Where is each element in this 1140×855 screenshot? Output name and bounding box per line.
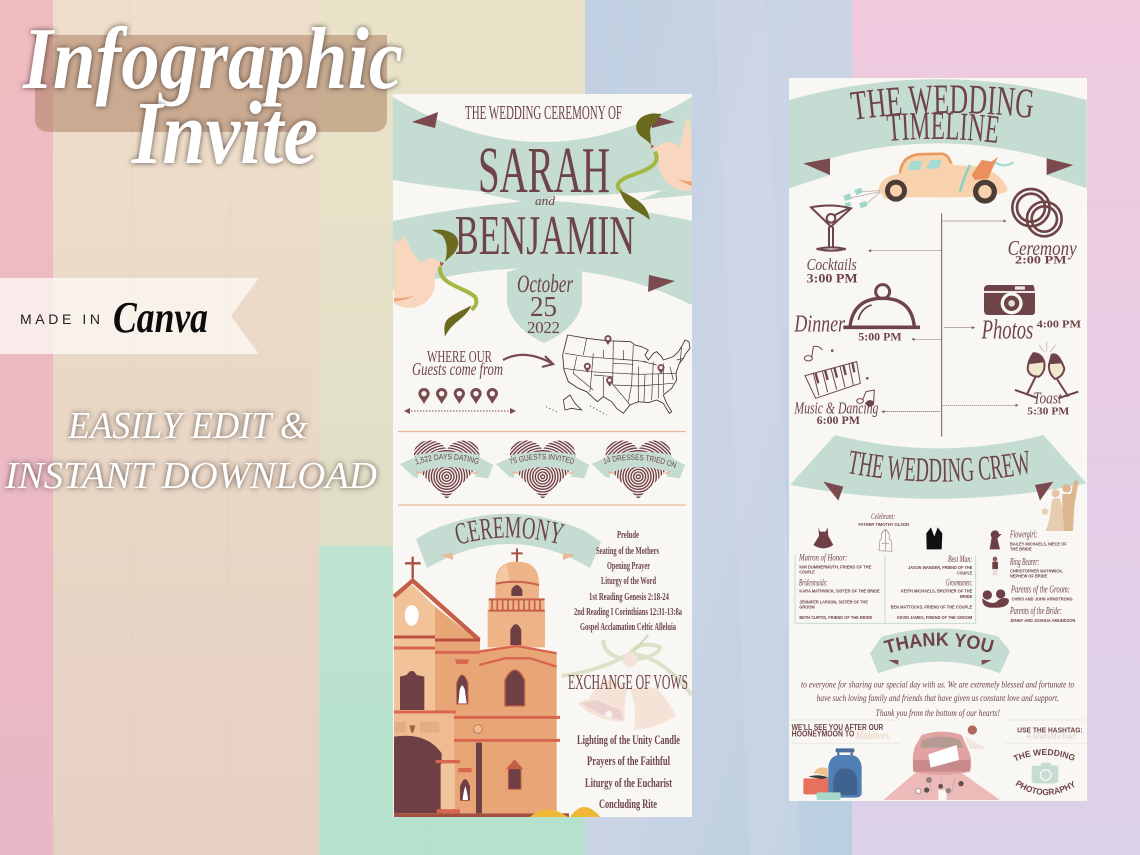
photographer badge: THE WEDDING — [1012, 749, 1075, 761]
groom's party: BEN MATTOCKS, FRIEND OF THE COUPLE — [891, 604, 972, 609]
illustration: pink getaway car and road — [883, 725, 1000, 800]
timeline title — [850, 85, 1033, 143]
label: music and dancing — [794, 398, 879, 427]
label: cocktails — [807, 255, 858, 285]
title line two: Invite — [131, 84, 318, 183]
vows list — [577, 732, 680, 811]
stat: guests invited: 75 GUESTS INVITED — [509, 454, 574, 464]
label: photos: Photos — [981, 314, 1033, 344]
illustration: wedding car — [843, 154, 1013, 208]
thank you banner — [870, 628, 1010, 673]
lower niche — [460, 779, 470, 801]
honeymoon note — [792, 723, 889, 742]
tower cross — [511, 548, 523, 562]
ring bearer text: NEPHEW OF BRIDE — [1010, 573, 1047, 578]
ceremony order list: Seating of the Mothers — [596, 546, 659, 557]
main title: Infographic Invite — [22, 11, 403, 183]
ceremony order list — [574, 530, 682, 633]
label: photos: 4:00 PM — [1037, 319, 1081, 330]
label: dinner — [794, 312, 902, 343]
made in canva ribbon — [0, 278, 259, 354]
ceremony banner — [416, 514, 601, 568]
dotted double arrow — [404, 408, 516, 414]
icon: keyboard and notes — [804, 346, 874, 406]
icon: suit — [926, 527, 942, 549]
timeline spine and arrows — [868, 213, 1018, 437]
round medallion — [474, 725, 482, 733]
bride's party: GROOM — [799, 604, 815, 609]
side niche — [457, 675, 468, 704]
banding — [394, 637, 480, 640]
tagline: EASILY EDIT & — [67, 405, 308, 447]
label: cocktails: 3:00 PM — [807, 271, 858, 285]
stat: dresses tried on — [592, 440, 685, 500]
heading: exchange of vows: EXCHANGE OF VOWS — [568, 670, 688, 694]
roof edge — [394, 581, 479, 640]
lower left wall — [394, 713, 454, 813]
groom's party: Best Man: — [948, 555, 972, 565]
thank you section — [790, 628, 1086, 800]
hashtag note: USE THE HASHTAG: — [1017, 725, 1083, 734]
label: dinner: 5:00 PM — [858, 331, 902, 343]
wedding crew section — [790, 435, 1086, 624]
icon: camera — [984, 285, 1035, 315]
illustration: luggage — [803, 748, 862, 800]
main arched door — [394, 736, 442, 813]
date shield: 2022 — [527, 318, 560, 337]
flower girl text — [1009, 530, 1067, 552]
photographer badge — [1012, 749, 1075, 796]
timeline title: TIMELINE — [886, 112, 999, 143]
bride's party: Bridesmaids: — [799, 579, 827, 589]
label: dinner: Dinner — [794, 312, 845, 338]
label: music and dancing: 6:00 PM — [817, 415, 860, 427]
label: music and dancing: Music & Dancing — [794, 398, 879, 417]
header banners — [393, 97, 692, 305]
title line one: Infographic — [22, 11, 403, 108]
ring bearer text: CHRISTOPHER MATHWICK, — [1010, 568, 1063, 573]
bride's party: KIM DUMMERMUTH, FRIEND OF THE — [799, 564, 871, 569]
and: and — [535, 193, 556, 208]
icon: wedding bells — [562, 635, 692, 730]
stat: days dating — [400, 440, 494, 500]
dark pilaster — [476, 743, 482, 813]
illustration: church — [394, 548, 601, 817]
icon: wedding rings — [1012, 189, 1062, 236]
bride's party: JENNIFER LARSON, SISTER OF THE — [799, 599, 868, 604]
flower girl text: BAILEY MICHAELS, NIECE OF — [1010, 542, 1067, 547]
panel: wedding timeline card — [789, 78, 1087, 801]
tagline: INSTANT DOWNLOAD — [4, 455, 377, 497]
label: cocktails: Cocktails — [807, 255, 857, 274]
icon: left dove with ribbon — [394, 230, 476, 337]
icon: bishop outline — [879, 529, 892, 551]
church cross — [405, 557, 421, 578]
ground strip — [394, 813, 569, 817]
vows list: Prayers of the Faithful — [587, 753, 670, 768]
octagon bands — [479, 646, 557, 667]
hashtag note: #AdamMichael — [1027, 731, 1077, 740]
timeline banner — [789, 79, 1087, 188]
icon: martini — [811, 206, 851, 251]
bride's party: Matron of Honor: — [798, 553, 847, 564]
made in canva ribbon: Canva — [113, 293, 208, 342]
label: ceremony — [1008, 238, 1077, 266]
thank you title: THANK YOU — [883, 632, 994, 653]
bride's party: KARA MATHWICK, SISTER OF THE BRIDE — [799, 589, 880, 594]
groom's party: BRIDE — [960, 594, 972, 599]
party column frame — [795, 555, 976, 623]
ceremony order list: 1st Reading Genesis 2:18-24 — [589, 592, 669, 603]
icon: cloche — [843, 285, 920, 327]
stats: fingerprint hearts — [400, 440, 685, 500]
label: toast: 5:30 PM — [1027, 405, 1070, 417]
panel: wedding ceremony invite card — [393, 94, 692, 817]
bride's party — [798, 553, 880, 620]
groom's party: Groomsmen: — [946, 579, 972, 589]
parents text: JENNY AND JOSHUA AMUNDSON — [1010, 618, 1075, 623]
label: toast — [1027, 388, 1070, 417]
banner fold triangles — [412, 112, 675, 292]
celebrant: FATHER TIMOTHY OLSON — [858, 522, 909, 527]
ceremony order list: 2nd Reading I Corinthians 12:31-13:8a — [574, 607, 682, 618]
date shield — [507, 261, 582, 343]
tower upper drum and dome — [495, 562, 539, 598]
honeymoon note: HOONEYMOON TO — [792, 730, 854, 739]
large tower window — [505, 670, 525, 706]
honeymoon note: Maldives — [855, 728, 889, 742]
date shield: October — [517, 271, 573, 298]
ring bearer text — [1009, 557, 1063, 578]
label: toast: Toast — [1033, 388, 1063, 407]
parents text: CHRIS AND JOHN ARMSTRONG — [1012, 597, 1073, 602]
ledge — [455, 659, 469, 664]
groom's party: COUPLE — [957, 570, 972, 575]
honeymoon note: WE'LL SEE YOU AFTER OUR — [792, 723, 884, 732]
column — [441, 764, 455, 809]
parents text: Parents of the Groom: — [1010, 585, 1070, 596]
parents text: Parents of the Bride: — [1009, 606, 1062, 617]
crew title: THE WEDDING CREW — [849, 450, 1028, 482]
main body — [435, 640, 557, 813]
name: Sarah: SARAH — [478, 134, 610, 207]
stat: dresses tried on: 14 DRESSES TRIED ON — [603, 454, 677, 468]
vows list: Lighting of the Unity Candle — [577, 732, 680, 747]
icon: dress — [813, 527, 833, 548]
gable facade — [394, 585, 435, 713]
icon: ring bearer — [992, 557, 998, 575]
name: Benjamin: BENJAMIN — [455, 205, 635, 267]
title backing shape — [35, 35, 387, 132]
icon: toasting glasses — [1015, 342, 1078, 398]
flower girl text: Flowergirl: — [1009, 530, 1037, 541]
stat: guests invited — [496, 440, 590, 500]
ring bearer text: Ring Bearer: — [1009, 557, 1039, 568]
thank you message: Thank you from the bottom of our hearts! — [876, 708, 1000, 718]
small gabled window — [506, 759, 523, 769]
groom's party: JASON WANDER, FRIEND OF THE — [908, 565, 972, 570]
bride's party: BETH CURTIS, FRIEND OF THE BRIDE — [799, 615, 872, 620]
photographer badge: PHOTOGRAPHY — [1016, 780, 1074, 796]
guest pins row — [418, 388, 498, 404]
icon: right dove with ribbon — [618, 113, 692, 220]
vows list: Liturgy of the Eucharist — [585, 775, 672, 790]
tower — [488, 610, 545, 647]
left door window — [400, 671, 424, 710]
guests section heading: Guests come from — [412, 359, 503, 379]
thank you message — [801, 679, 1075, 718]
illustration: bride and groom — [1042, 479, 1078, 531]
date shield: 25 — [530, 291, 557, 323]
icon: flower girl — [990, 530, 1002, 549]
thank you message: to everyone for sharing our special day with us. We are extremely blessed and fortunate to — [801, 679, 1075, 689]
vows list: Concluding Rite — [599, 796, 657, 811]
parents text — [1009, 585, 1075, 623]
crew banner — [790, 435, 1087, 499]
flower girl text: THE BRIDE — [1010, 547, 1032, 552]
celebrant: Celebrant: — [871, 511, 895, 521]
hashtag note — [1017, 725, 1083, 740]
groom's party: KEITH MICHAELS, BROTHER OF THE — [901, 589, 972, 594]
tower windows — [510, 585, 522, 645]
timeline icons and labels — [794, 154, 1081, 437]
bride's party: COUPLE — [799, 569, 815, 574]
divider — [398, 432, 686, 505]
ceremony order list: Liturgy of the Word — [601, 576, 656, 587]
balcony — [489, 599, 545, 610]
yellow shrubs — [529, 807, 601, 817]
thank you message: have such loving family and friends that have given us constant love and support. — [817, 693, 1059, 703]
groom's party — [891, 555, 973, 620]
stat: days dating: 1,522 DAYS DATING — [415, 454, 479, 464]
made in canva ribbon: MADE IN — [20, 311, 102, 327]
label: ceremony: Ceremony — [1008, 238, 1077, 260]
timeline title: THE WEDDING — [850, 85, 1033, 120]
ceremony heading: THE WEDDING CEREMONY OF — [465, 102, 622, 124]
icon: parents silhouette — [982, 589, 1009, 608]
tagline — [4, 405, 377, 497]
ceremony banner: CEREMONY — [456, 517, 565, 544]
US map with pins — [546, 335, 690, 415]
label: ceremony: 2:00 PM — [1015, 252, 1067, 266]
oval window — [405, 605, 419, 626]
ceremony order list: Prelude — [617, 530, 639, 541]
arrow to map — [503, 355, 553, 367]
celebrant — [858, 511, 909, 527]
ceremony order list: Opening Prayer — [607, 561, 650, 572]
groom's party: KEVIN JAMES, FRIEND OF THE GROOM — [897, 615, 973, 620]
guests section heading: WHERE OUR — [427, 347, 492, 366]
guests section heading — [412, 351, 502, 379]
ceremony order list: Gospel Acclamation Celtic Alleluia — [580, 622, 676, 633]
